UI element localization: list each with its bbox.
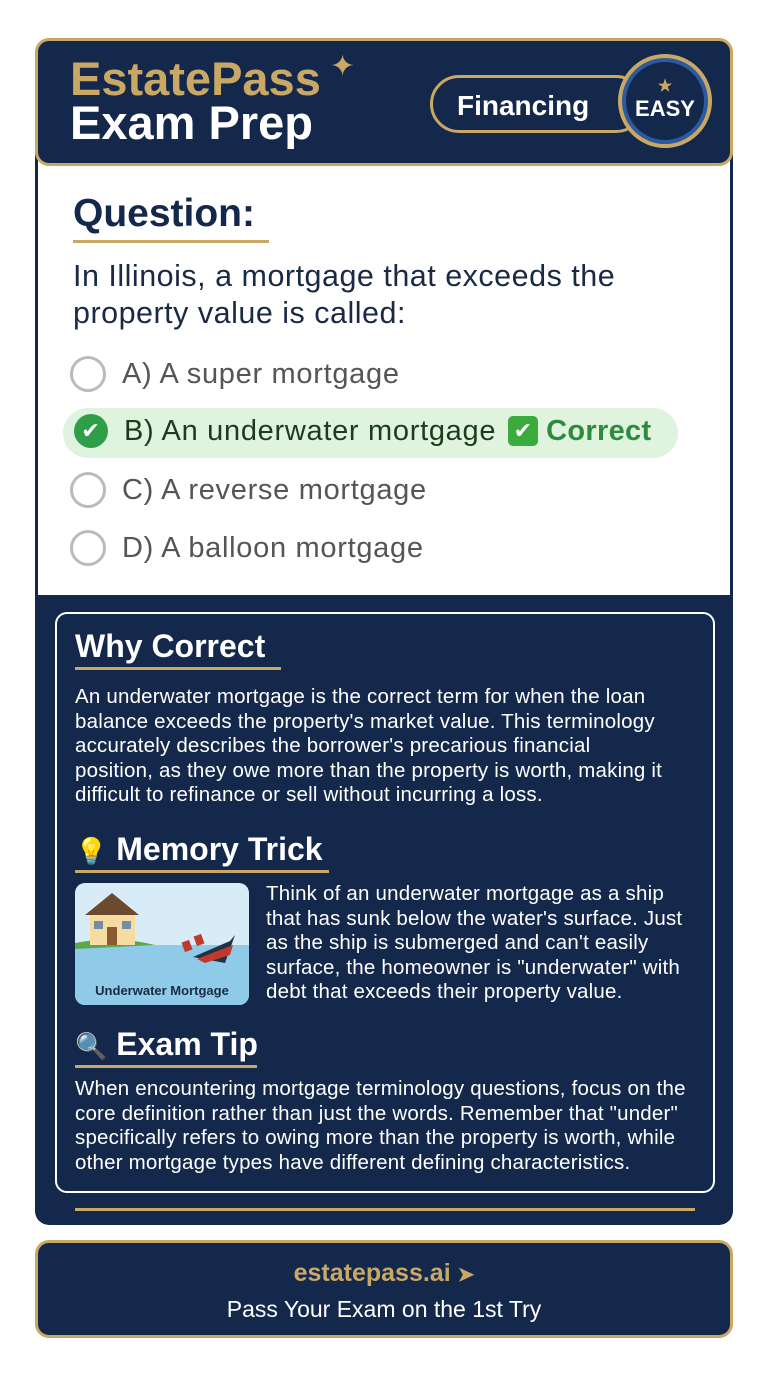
text: ✔	[514, 418, 533, 443]
memory trick text: that has sunk below the water's surface. Just	[266, 906, 682, 930]
text: B) An underwater mortgage	[124, 414, 496, 446]
logo title: Exam Prep	[70, 96, 313, 149]
question text: In Illinois, a mortgage that exceeds the	[73, 259, 615, 293]
exam tip text: other mortgage types have different defining characteristics.	[75, 1150, 630, 1174]
footer slogan: Pass Your Exam on the 1st Try	[227, 1296, 541, 1322]
memory trick text: as the ship is submerged and can't easily	[266, 931, 648, 954]
why correct text: An underwater mortgage is the correct term for when the loan	[75, 685, 645, 708]
exam tip text: core definition rather than just the words. Remember that "under"	[75, 1102, 678, 1124]
option D: D) A balloon mortgage	[122, 532, 424, 564]
why correct text: difficult to refinance or sell without incurring a loss.	[75, 783, 543, 806]
footer url: estatepass.ai ➤	[294, 1259, 474, 1287]
question text: property value is called:	[73, 296, 406, 330]
difficulty badge	[618, 54, 712, 148]
why correct text	[75, 685, 662, 806]
illustration: underwater mortgage	[75, 883, 249, 1005]
option C: C) A reverse mortgage	[122, 474, 427, 506]
why correct text: accurately describes the borrower's precarious financial	[75, 734, 590, 757]
icon: green check: ✔	[81, 418, 101, 443]
why correct text: position, as they owe more than the property is worth, making it	[75, 758, 662, 782]
option B correct	[63, 408, 678, 458]
memory trick text: surface, the homeowner is "underwater" with	[266, 956, 680, 978]
exam tip text	[75, 1077, 686, 1174]
logo title	[70, 52, 321, 149]
text: Correct	[546, 414, 651, 446]
difficulty badge: ★	[658, 78, 672, 95]
icon: compass star: ✦	[330, 50, 355, 83]
why correct heading: Why Correct	[75, 628, 265, 664]
gold divider	[75, 1208, 695, 1211]
question text	[73, 259, 615, 330]
question heading: Question:	[73, 192, 255, 235]
inner box	[55, 612, 715, 1193]
memory trick text: Think of an underwater mortgage as a ship	[266, 882, 664, 905]
footer	[35, 1240, 733, 1338]
why correct text: balance exceeds the property's market value. This terminology	[75, 710, 655, 732]
question panel	[35, 150, 733, 596]
memory trick heading: 💡 Memory Trick	[75, 831, 323, 867]
explanation panel	[35, 595, 733, 1225]
category pill	[430, 75, 645, 133]
header	[35, 38, 733, 166]
memory trick text	[266, 882, 682, 1003]
category pill: Financing	[457, 90, 589, 121]
exam tip text: When encountering mortgage terminology questions, focus on the	[75, 1077, 686, 1100]
logo title: EstatePass	[70, 52, 321, 105]
memory trick text: debt that exceeds their property value.	[266, 980, 623, 1003]
option A: A) A super mortgage	[122, 358, 400, 390]
exam tip text: specifically refers to owing more than the property is worth, while	[75, 1126, 675, 1149]
icon: green check	[74, 414, 108, 448]
exam tip heading: 🔍 Exam Tip	[75, 1026, 258, 1062]
difficulty badge: EASY	[635, 96, 695, 121]
illustration caption: Underwater Mortgage	[95, 983, 229, 998]
